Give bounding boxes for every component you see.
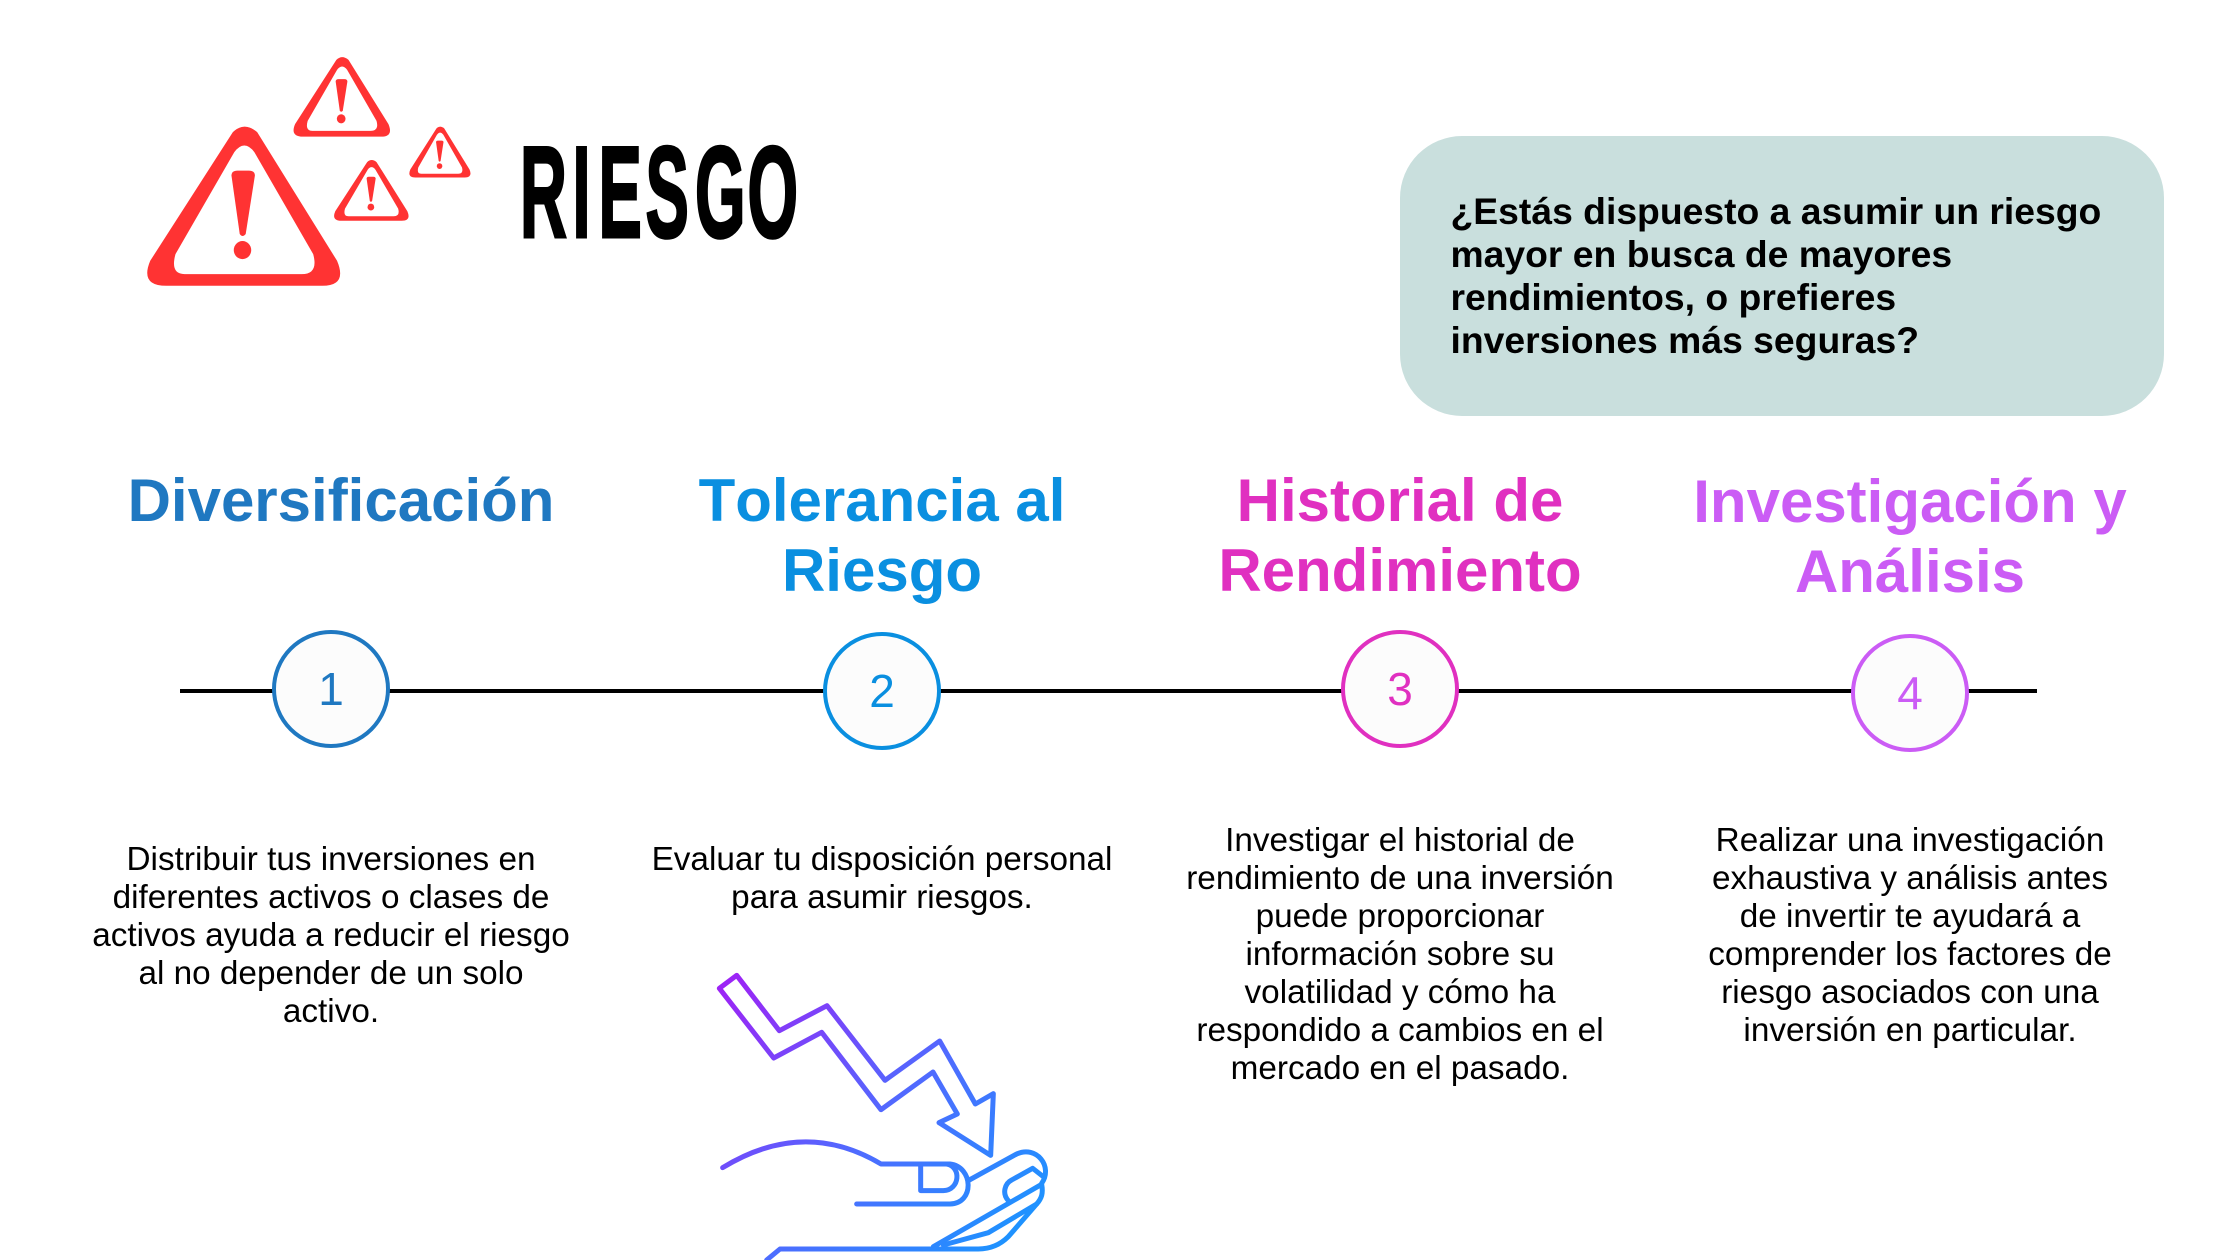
text: investigación description — [1708, 822, 2112, 1049]
heading: Investigación y Análisis: Investigación y — [1693, 468, 2127, 535]
step 1 circle: 1 — [318, 663, 344, 715]
text: historial description: información sobre su — [1245, 936, 1555, 973]
text: diversificación description — [92, 840, 570, 1030]
text: investigación description: riesgo asociados con una — [1721, 974, 2099, 1011]
icon: top warning triangle — [294, 57, 390, 137]
text: investigación description: Realizar una investigación — [1716, 822, 2104, 859]
text: diversificación description: activos ayuda a reducir el riesgo — [92, 916, 570, 954]
text: diversificación description: activo. — [283, 992, 379, 1030]
callout text: ¿Estás dispuesto a asumir un riesgo — [1450, 190, 2101, 232]
callout text — [1450, 190, 2101, 361]
step 3 circle: 3 — [1387, 663, 1413, 715]
callout text: inversiones más seguras? — [1450, 319, 1919, 361]
heading: Historial de Rendimiento — [1218, 467, 1582, 604]
callout text: rendimientos, o prefieres — [1450, 276, 1896, 318]
text: tolerancia description — [652, 840, 1112, 916]
text: investigación description: de invertir te ayudará a — [1740, 898, 2080, 935]
heading: Investigación y Análisis: Análisis — [1795, 538, 2025, 605]
text: historial description: puede proporcionar — [1256, 898, 1544, 935]
heading: Investigación y Análisis — [1693, 468, 2127, 605]
heading: Tolerancia al Riesgo — [699, 467, 1065, 604]
step 2 circle — [823, 632, 941, 750]
text: diversificación description: Distribuir tus inversiones en — [127, 840, 535, 878]
text: historial description — [1186, 822, 1614, 1087]
timeline line — [180, 689, 2037, 693]
step 2 circle: 2 — [869, 665, 895, 717]
text: tolerancia description: para asumir riesgos. — [731, 878, 1033, 916]
icon: warning triangles — [147, 57, 470, 286]
heading: Diversificación: Diversificación — [128, 467, 554, 534]
text: historial description: mercado en el pasado. — [1231, 1050, 1569, 1087]
text: diversificación description: al no depender de un solo — [138, 954, 524, 992]
heading: Tolerancia al Riesgo: Riesgo — [782, 537, 982, 604]
step 3 circle — [1341, 630, 1459, 748]
icon: right warning triangle — [409, 127, 471, 178]
text: historial description: Investigar el historial de — [1225, 822, 1575, 859]
step 1 circle — [272, 630, 390, 748]
icon: middle warning triangle — [334, 160, 409, 221]
text: diversificación description: diferentes activos o clases de — [113, 878, 549, 916]
icon: falling arrow over hand — [716, 972, 1048, 1260]
text: investigación description: exhaustiva y análisis antes — [1712, 860, 2108, 897]
text: historial description: rendimiento de una inversión — [1186, 860, 1614, 897]
hand — [723, 1142, 1046, 1260]
text: investigación description: comprender los factores de — [1708, 936, 2112, 973]
falling arrow — [719, 975, 993, 1155]
text: investigación description: inversión en particular. — [1743, 1012, 2077, 1049]
text: historial description: volatilidad y cómo ha — [1245, 974, 1555, 1011]
heading: Historial de Rendimiento: Historial de — [1237, 467, 1563, 534]
heading: Tolerancia al Riesgo: Tolerancia al — [699, 467, 1065, 534]
step 4 circle: 4 — [1897, 667, 1923, 719]
callout text: mayor en busca de mayores — [1450, 233, 1952, 275]
panel: question callout — [1400, 136, 2164, 416]
text: tolerancia description: Evaluar tu disposición personal — [652, 840, 1112, 878]
step 4 circle — [1851, 634, 1969, 752]
heading: Historial de Rendimiento: Rendimiento — [1218, 537, 1582, 604]
icon: large warning triangle — [147, 127, 340, 286]
text: historial description: respondido a cambios en el — [1196, 1012, 1604, 1049]
